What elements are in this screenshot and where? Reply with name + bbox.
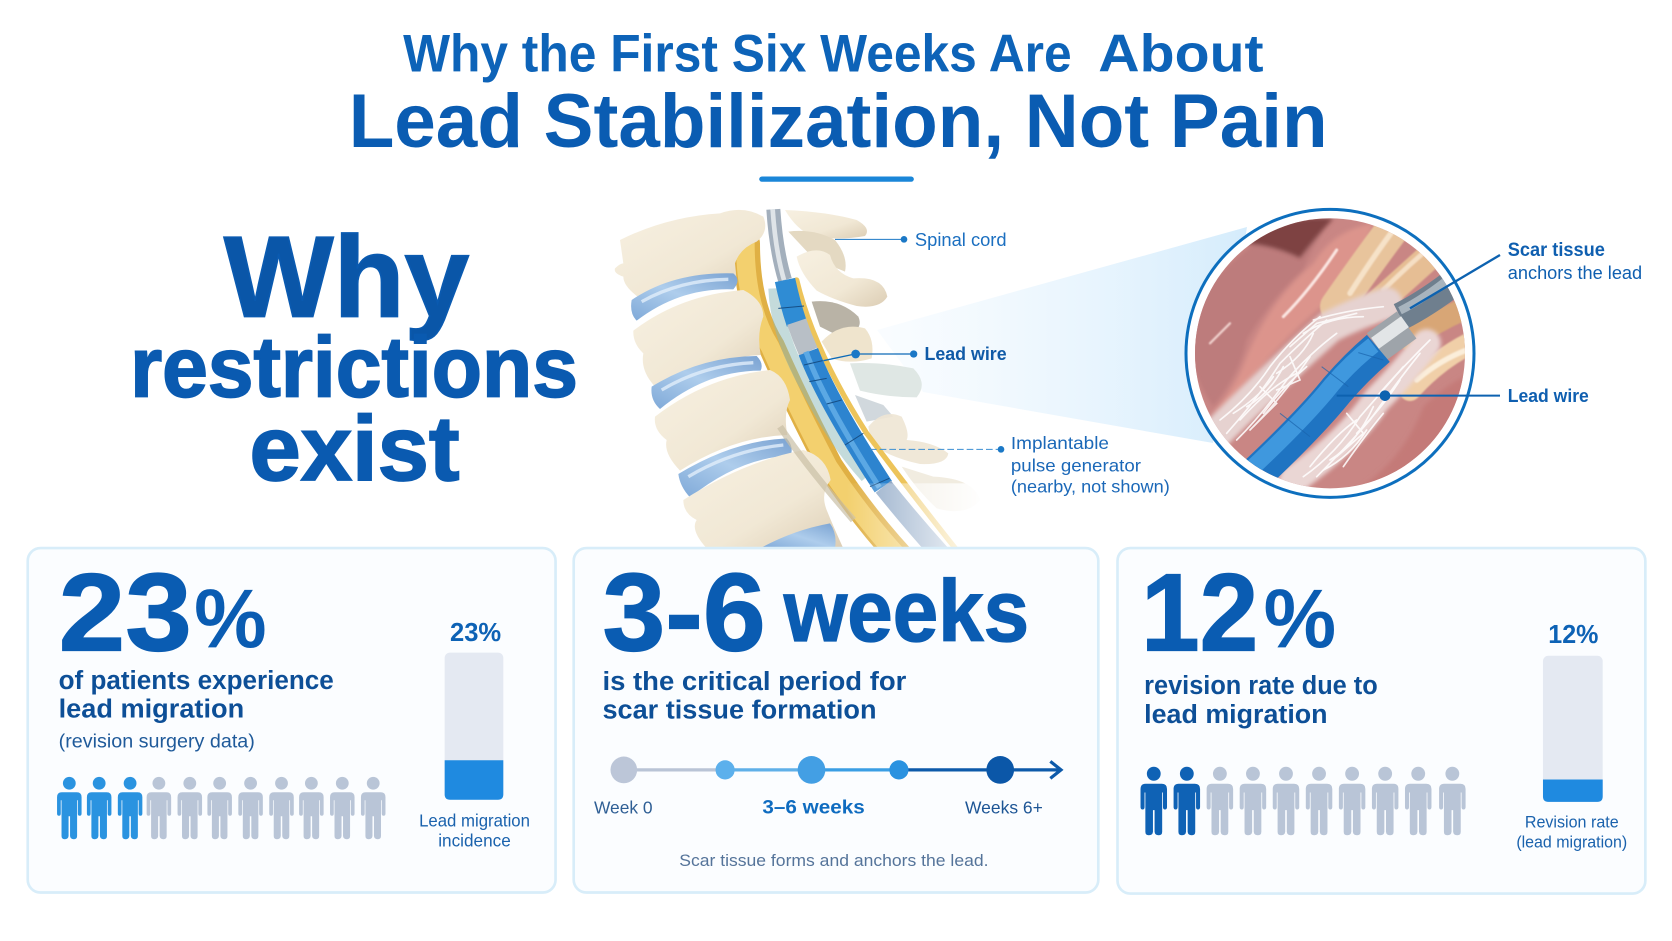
label: lead wire: Lead wire — [925, 344, 1007, 364]
stat 3-6 weeks — [602, 551, 1029, 674]
label: spinal cord: Spinal cord — [915, 230, 1007, 250]
description — [602, 668, 906, 725]
zoom cone — [877, 227, 1247, 443]
description: revision rate due to — [1144, 672, 1378, 700]
timeline: 3–6 weeks — [762, 798, 865, 819]
spinous processes — [785, 210, 980, 511]
label: implantable pulse generator — [1011, 433, 1170, 497]
bar chart: 23%: incidence — [438, 831, 511, 851]
description — [59, 667, 334, 752]
stat 3-6 weeks: weeks — [783, 562, 1029, 660]
callout lines — [823, 236, 1004, 453]
label: lead wire detail: Lead wire — [1508, 386, 1589, 406]
description: lead migration — [59, 696, 244, 724]
label: scar tissue: Scar tissue — [1508, 240, 1605, 261]
icon: people 2 of 10 — [1141, 767, 1466, 835]
stat 23%: % — [194, 572, 267, 665]
description — [1144, 672, 1378, 729]
timeline — [594, 756, 1061, 819]
lead wire — [773, 209, 940, 553]
callout lines — [1337, 255, 1500, 401]
title — [349, 24, 1328, 164]
description: (revision surgery data) — [59, 731, 255, 752]
bar chart: 12%: 12% — [1548, 621, 1599, 649]
bar chart: 23%: Lead migration — [419, 810, 530, 830]
spinal cord — [745, 243, 957, 557]
stat 23% — [59, 551, 267, 674]
label: scar tissue — [1508, 240, 1642, 283]
timeline: Weeks 6+ — [965, 798, 1043, 818]
bar chart: 12% — [1516, 621, 1627, 852]
description: of patients experience — [59, 667, 334, 695]
label: implantable pulse generator: pulse generator — [1011, 455, 1141, 475]
panel: lead migration — [28, 548, 556, 893]
stat 12%: % — [1264, 572, 1336, 665]
description: is the critical period for — [602, 668, 906, 696]
bar chart: 23% — [419, 619, 530, 851]
description: scar tissue formation — [602, 697, 877, 725]
heading: why restrictions exist: Why — [224, 214, 469, 342]
stat 23%: 23 — [59, 551, 192, 674]
description: lead migration — [1144, 701, 1328, 729]
stat 12%: 12 — [1141, 551, 1258, 674]
heading: why restrictions exist — [130, 214, 578, 500]
caption: Scar tissue forms and anchors the lead. — [679, 851, 988, 870]
label: implantable pulse generator: (nearby, not shown) — [1011, 477, 1170, 497]
vertebrae and discs — [615, 210, 843, 548]
timeline: Week 0 — [594, 798, 653, 818]
bar chart: 23%: 23% — [450, 619, 501, 647]
title: Lead Stabilization, Not Pain — [349, 79, 1328, 164]
stat 12% — [1141, 551, 1336, 674]
label: implantable pulse generator: Implantable — [1011, 433, 1109, 453]
stat 3-6 weeks: 3-6 — [602, 551, 766, 674]
title: Why the First Six Weeks Are — [403, 24, 1072, 83]
bar chart: 12%: Revision rate — [1525, 812, 1619, 831]
heading: why restrictions exist: exist — [250, 398, 460, 500]
label: scar tissue: anchors the lead — [1508, 263, 1642, 283]
title: About — [1098, 24, 1264, 83]
magnified circle: scar tissue around lead — [1186, 209, 1500, 497]
panel: critical period — [574, 548, 1098, 893]
icon: people 3 of 11 — [57, 777, 385, 839]
illustration: spine with lead — [615, 209, 1004, 557]
heading: why restrictions exist: restrictions — [130, 321, 578, 416]
bar chart: 12%: (lead migration) — [1516, 833, 1627, 852]
panel: revision rate — [1118, 548, 1645, 894]
